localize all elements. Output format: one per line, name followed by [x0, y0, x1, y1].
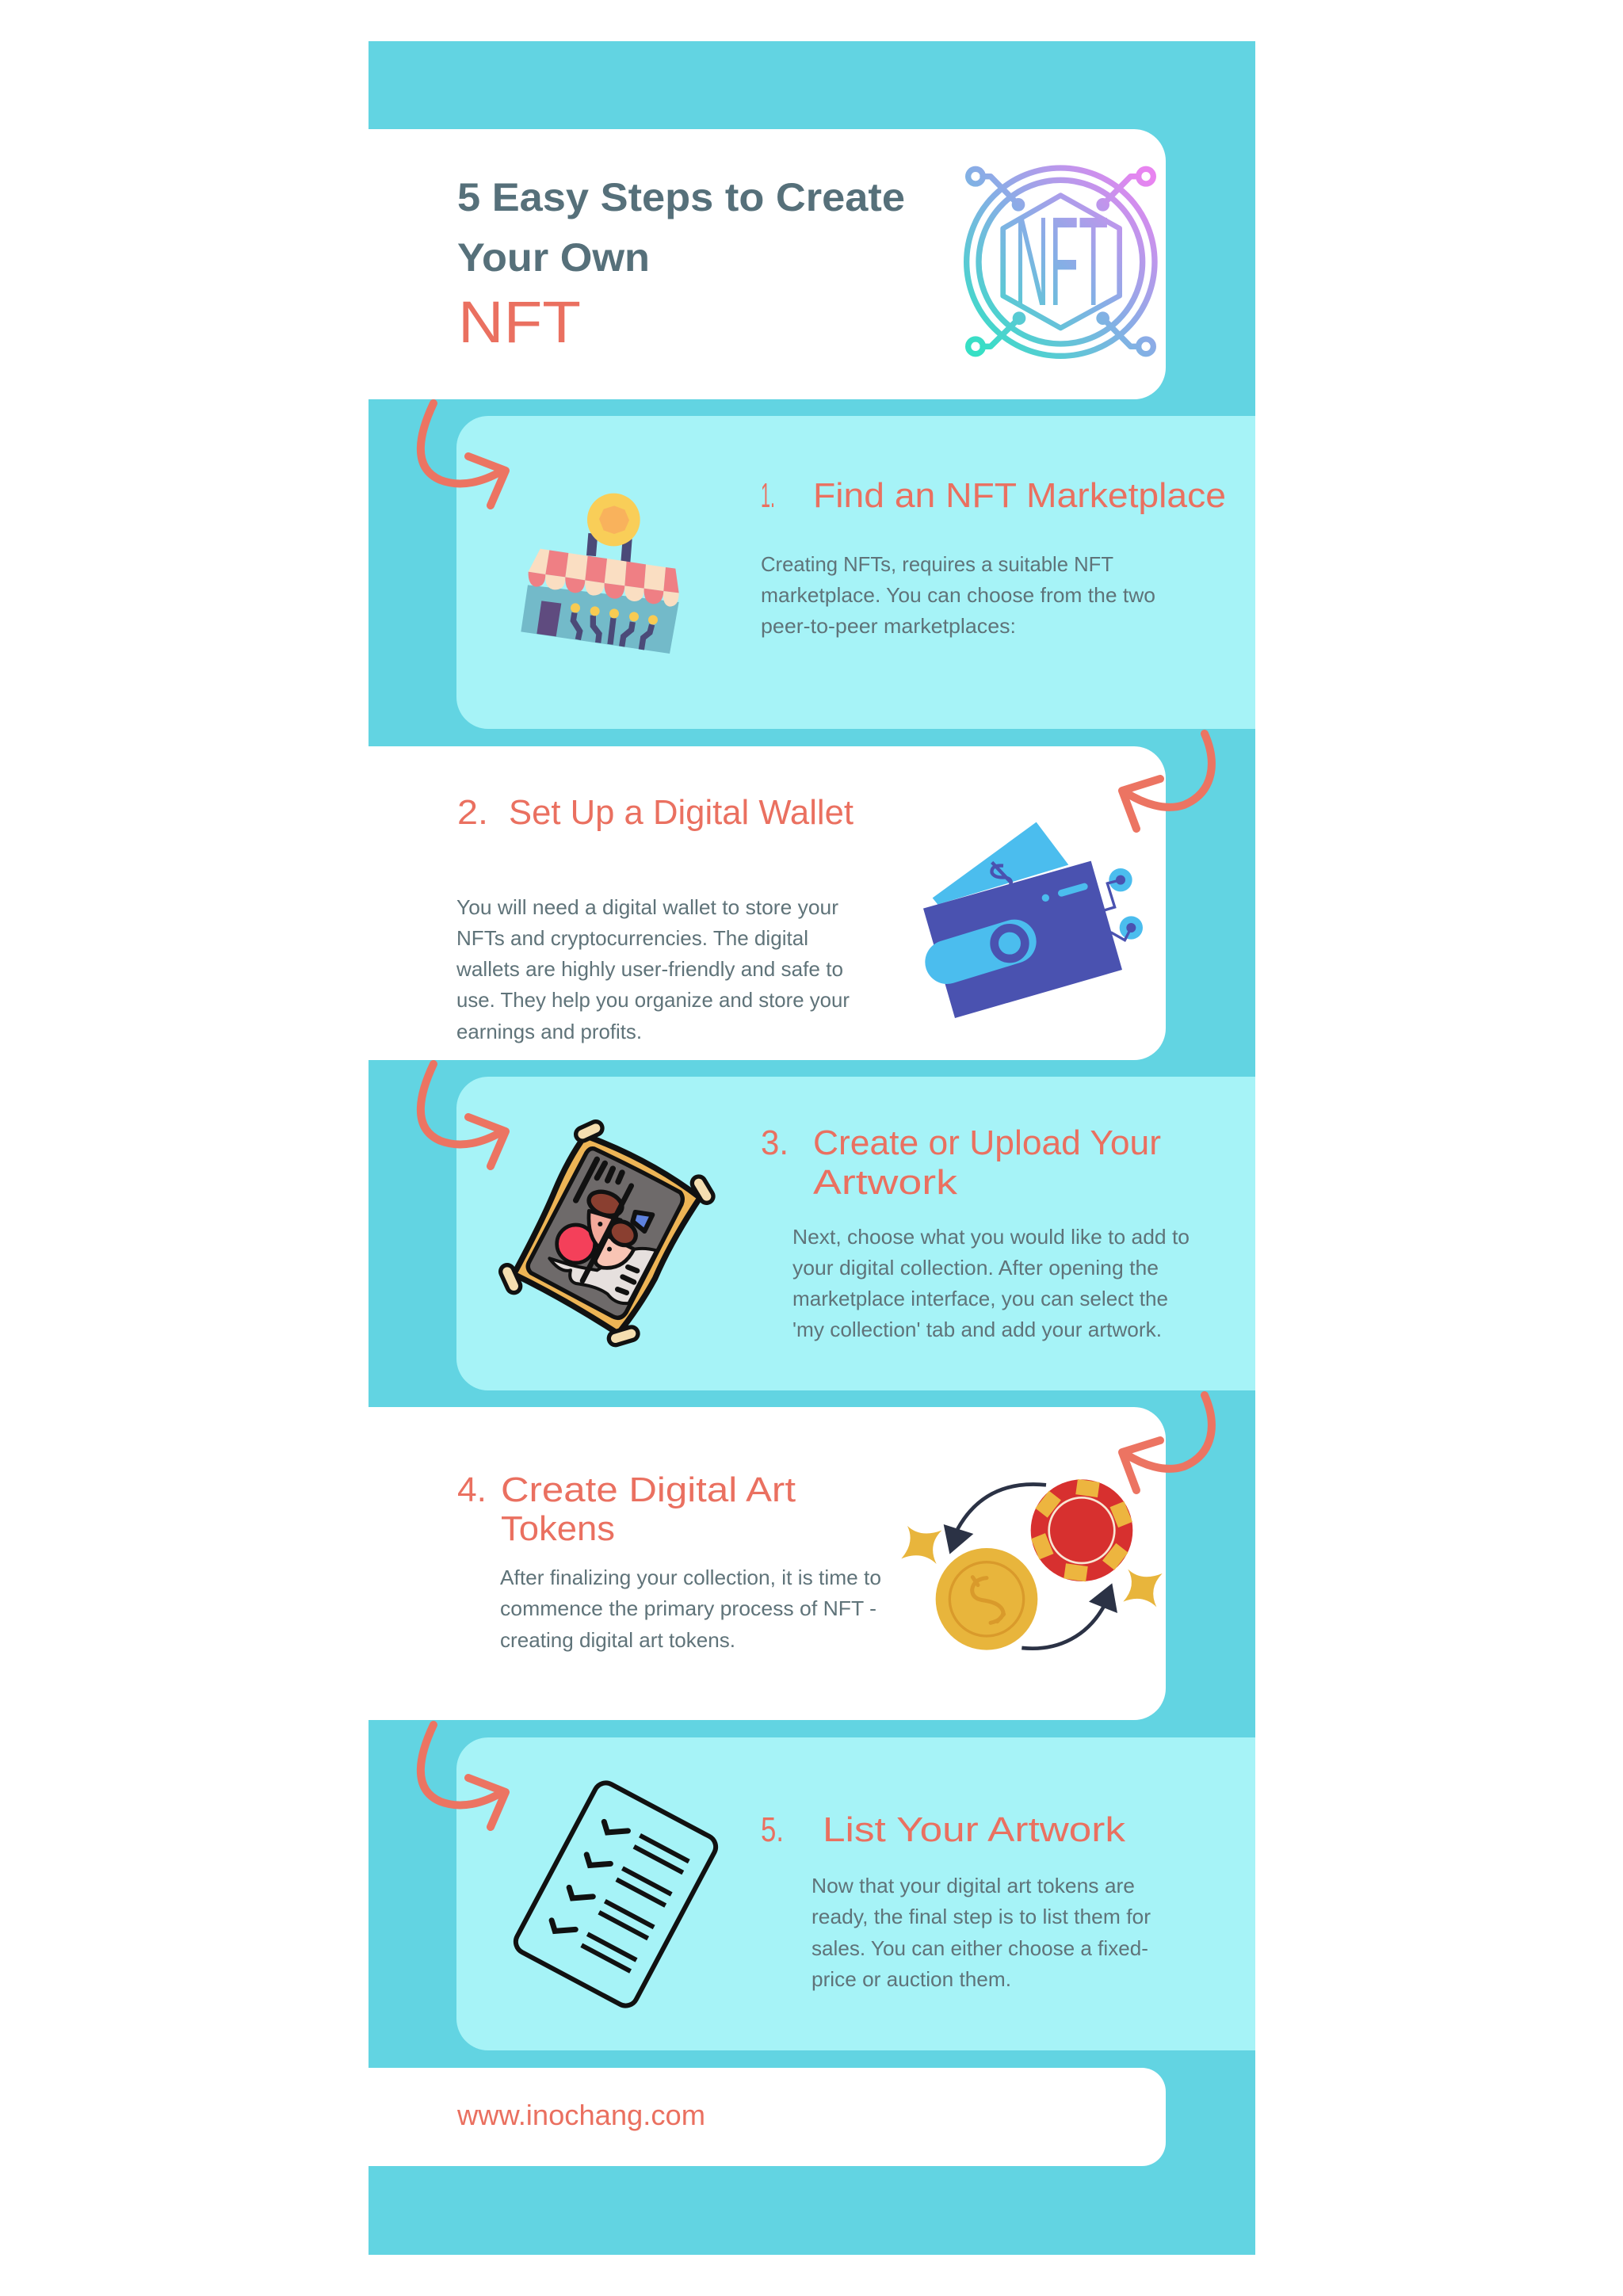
step 5 text: sales. You can either choose a fixed-: [812, 1936, 1148, 1960]
icon: wallet: [923, 822, 1143, 1018]
arrow: step 4 to step 5: [421, 1725, 506, 1827]
icon: market stall: [521, 494, 679, 654]
step 5 text: Now that your digital art tokens are: [812, 1874, 1135, 1897]
icon: NFT logo: [967, 168, 1155, 356]
step 3 text: [792, 1225, 1190, 1341]
step 3 text: marketplace interface, you can select the: [792, 1287, 1168, 1310]
step 4 text: creating digital art tokens.: [500, 1628, 735, 1652]
step 1 heading: 1.: [761, 476, 775, 515]
panel: step 3: [456, 1077, 1255, 1390]
title: 5 Easy Steps to Create: [457, 175, 905, 219]
title: [457, 175, 905, 355]
step 4 heading: Tokens: [501, 1509, 615, 1548]
step 4 text: After finalizing your collection, it is time to: [500, 1566, 881, 1589]
arrow: step 3 to step 4: [1122, 1395, 1212, 1490]
step 1 text: peer-to-peer marketplaces:: [761, 614, 1016, 638]
icon: NFT logo: NFT: [1014, 190, 1108, 332]
step 1 text: marketplace. You can choose from the two: [761, 583, 1155, 607]
step 4 text: [500, 1566, 881, 1652]
step 2 heading: 2.: [457, 793, 488, 832]
background band: [369, 41, 1255, 2255]
panel: footer: [369, 2068, 1166, 2166]
step 1 text: Creating NFTs, requires a suitable NFT: [761, 552, 1113, 576]
step 2 heading: Set Up a Digital Wallet: [509, 793, 854, 832]
step 5 text: price or auction them.: [812, 1967, 1011, 1991]
step 3 heading: [761, 1123, 1161, 1202]
step 4 heading: [457, 1470, 796, 1548]
step 4 text: commence the primary process of NFT -: [500, 1596, 876, 1620]
step 3 text: 'my collection' tab and add your artwork.: [792, 1318, 1162, 1341]
step 5 text: [812, 1874, 1151, 1991]
step 4 heading: Create Digital Art: [501, 1470, 796, 1509]
title: Your Own: [457, 235, 650, 280]
arrow: header to step 1: [421, 403, 506, 505]
step 2 text: You will need a digital wallet to store your: [456, 895, 838, 919]
step 2 text: NFTs and cryptocurrencies. The digital: [456, 926, 808, 950]
arrow: step 2 to step 3: [421, 1064, 506, 1166]
arrow: step 1 to step 2: [1122, 734, 1212, 829]
step 1 text: [761, 552, 1155, 638]
icon: token exchange: [901, 1479, 1163, 1650]
icon: picture frame: [507, 1128, 707, 1338]
panel: step 2: [369, 746, 1166, 1060]
footer link: www.inochang.com: [456, 2099, 705, 2131]
step 5 text: ready, the final step is to list them for: [812, 1905, 1151, 1928]
step 5 heading: 5.: [761, 1810, 784, 1849]
step 2 text: earnings and profits.: [456, 1020, 642, 1043]
step 5 heading: List Your Artwork: [823, 1810, 1126, 1849]
title: NFT: [458, 289, 581, 355]
step 4 heading: 4.: [457, 1470, 487, 1509]
step 1 heading: Find an NFT Marketplace: [813, 476, 1226, 515]
panel: step 1: [456, 416, 1255, 729]
panel: step 5: [456, 1737, 1255, 2050]
step 2 text: wallets are highly user-friendly and safe to: [456, 957, 843, 981]
step 2 text: use. They help you organize and store your: [456, 988, 850, 1012]
step 3 heading: 3.: [761, 1123, 789, 1162]
step 3 heading: Artwork: [813, 1163, 958, 1202]
icon: checklist: [512, 1779, 720, 2010]
step 2 text: [456, 895, 850, 1043]
step 3 heading: Create or Upload Your: [813, 1123, 1161, 1162]
step 3 text: Next, choose what you would like to add to: [792, 1225, 1190, 1249]
panel: header: [369, 129, 1166, 399]
step 3 text: your digital collection. After opening the: [792, 1256, 1159, 1280]
panel: step 4: [369, 1407, 1166, 1720]
